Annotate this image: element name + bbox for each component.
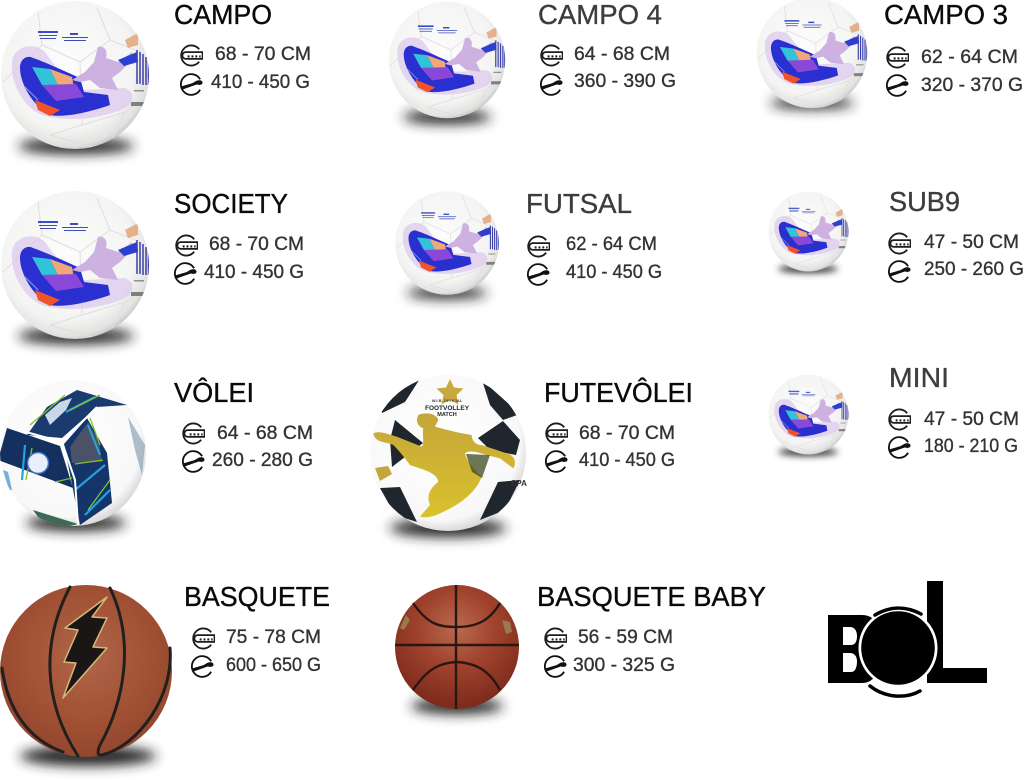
weight: 410 - 450 G bbox=[211, 71, 310, 93]
icon: weight bbox=[181, 74, 203, 95]
circumference: 56 - 59 CM bbox=[578, 626, 673, 648]
ball bbox=[769, 192, 848, 271]
panel: SOCIETY bbox=[1, 188, 304, 344]
heading: VÔLEI bbox=[174, 377, 254, 408]
ball bbox=[395, 191, 499, 295]
circumference: 64 - 68 CM bbox=[217, 422, 313, 444]
ball bbox=[1, 1, 149, 149]
circumference: 68 - 70 CM bbox=[209, 233, 304, 255]
icon: circumference bbox=[889, 409, 911, 430]
emblem text: FOOTVOLLEY bbox=[425, 405, 470, 412]
weight: 410 - 450 G bbox=[566, 261, 662, 283]
icon: circumference bbox=[181, 45, 203, 66]
heading: SUB9 bbox=[889, 186, 960, 217]
ball bbox=[757, 0, 867, 108]
footvolley ball bbox=[370, 374, 527, 531]
side text: SPA bbox=[511, 479, 527, 488]
icon: weight bbox=[889, 261, 911, 282]
weight: 410 - 450 G bbox=[204, 261, 304, 283]
weight: 260 - 280 G bbox=[212, 449, 313, 471]
lightning bolt bbox=[63, 597, 107, 698]
icon: weight bbox=[528, 264, 550, 285]
icon: weight bbox=[183, 451, 205, 472]
icon: circumference bbox=[528, 236, 550, 257]
icon: circumference bbox=[193, 628, 215, 649]
circumference: 62 - 64 CM bbox=[921, 46, 1018, 68]
circumference: 68 - 70 CM bbox=[579, 422, 675, 444]
badge bbox=[28, 452, 48, 474]
panel: FUTSAL bbox=[395, 188, 662, 299]
logo: BOL bbox=[828, 581, 987, 696]
panel: VÔLEI bbox=[0, 377, 313, 531]
weight: 300 - 325 G bbox=[573, 654, 675, 676]
heading: SOCIETY bbox=[174, 188, 288, 219]
star emblem bbox=[436, 379, 464, 404]
ball bbox=[1, 191, 149, 339]
icon: circumference bbox=[887, 47, 909, 68]
shadow bbox=[770, 97, 854, 109]
panel: MINI bbox=[769, 362, 1019, 458]
icon: weight bbox=[545, 656, 567, 677]
shadow bbox=[411, 698, 503, 714]
icon: circumference bbox=[176, 235, 198, 256]
panel: CAMPO bbox=[1, 0, 311, 154]
heading: BASQUETE BABY bbox=[537, 581, 766, 612]
shadow bbox=[18, 328, 134, 344]
panel: CAMPO 4 bbox=[389, 0, 676, 124]
panel: BASQUETE BABY bbox=[395, 581, 766, 714]
circumference: 68 - 70 CM bbox=[215, 43, 311, 65]
icon: weight bbox=[889, 437, 911, 458]
weight: 360 - 390 G bbox=[574, 70, 676, 92]
weight: 410 - 450 G bbox=[579, 449, 675, 471]
weight: 320 - 370 G bbox=[921, 74, 1023, 96]
heading: BASQUETE bbox=[184, 581, 330, 612]
heading: MINI bbox=[889, 362, 949, 393]
icon: circumference bbox=[541, 45, 563, 66]
volleyball bbox=[0, 380, 146, 528]
shadow bbox=[403, 110, 491, 124]
circumference: 47 - 50 CM bbox=[924, 231, 1019, 253]
icon: circumference bbox=[546, 423, 568, 444]
icon: weight bbox=[192, 656, 214, 677]
icon: weight bbox=[175, 263, 197, 284]
icon: weight bbox=[546, 451, 568, 472]
panel: FUTEVÔLEI bbox=[370, 374, 693, 537]
weight: 180 - 210 G bbox=[924, 435, 1018, 457]
shadow bbox=[20, 746, 156, 766]
circumference: 64 - 68 CM bbox=[574, 43, 670, 65]
circumference: 47 - 50 CM bbox=[924, 408, 1019, 430]
weight: 600 - 650 G bbox=[226, 654, 321, 676]
icon: weight bbox=[541, 74, 563, 95]
shadow bbox=[390, 519, 506, 537]
icon: circumference bbox=[183, 423, 205, 444]
panel: SUB9 bbox=[769, 186, 1024, 282]
emblem text: MATCH bbox=[437, 412, 457, 418]
heading: FUTEVÔLEI bbox=[544, 377, 693, 408]
heading: FUTSAL bbox=[526, 188, 632, 219]
shadow bbox=[18, 138, 134, 154]
weight: 250 - 260 G bbox=[924, 258, 1024, 280]
icon: weight bbox=[887, 75, 909, 96]
circumference: 75 - 78 CM bbox=[226, 626, 321, 648]
circumference: 62 - 64 CM bbox=[566, 233, 657, 255]
shadow bbox=[26, 515, 126, 531]
side logos bbox=[400, 615, 410, 630]
shadow bbox=[778, 448, 838, 456]
gold player silhouette bbox=[373, 413, 515, 517]
ball bbox=[389, 2, 505, 118]
panel: CAMPO 3 bbox=[757, 0, 1023, 109]
ball bbox=[769, 375, 848, 454]
shadow bbox=[407, 287, 487, 299]
panel: BASQUETE bbox=[0, 581, 330, 766]
basketball bbox=[0, 585, 172, 757]
basketball bbox=[395, 585, 519, 709]
shadow bbox=[778, 265, 838, 273]
icon: circumference bbox=[545, 628, 567, 649]
emblem text: W.I.B. OFFICIAL bbox=[432, 398, 463, 403]
icon: circumference bbox=[889, 233, 911, 254]
